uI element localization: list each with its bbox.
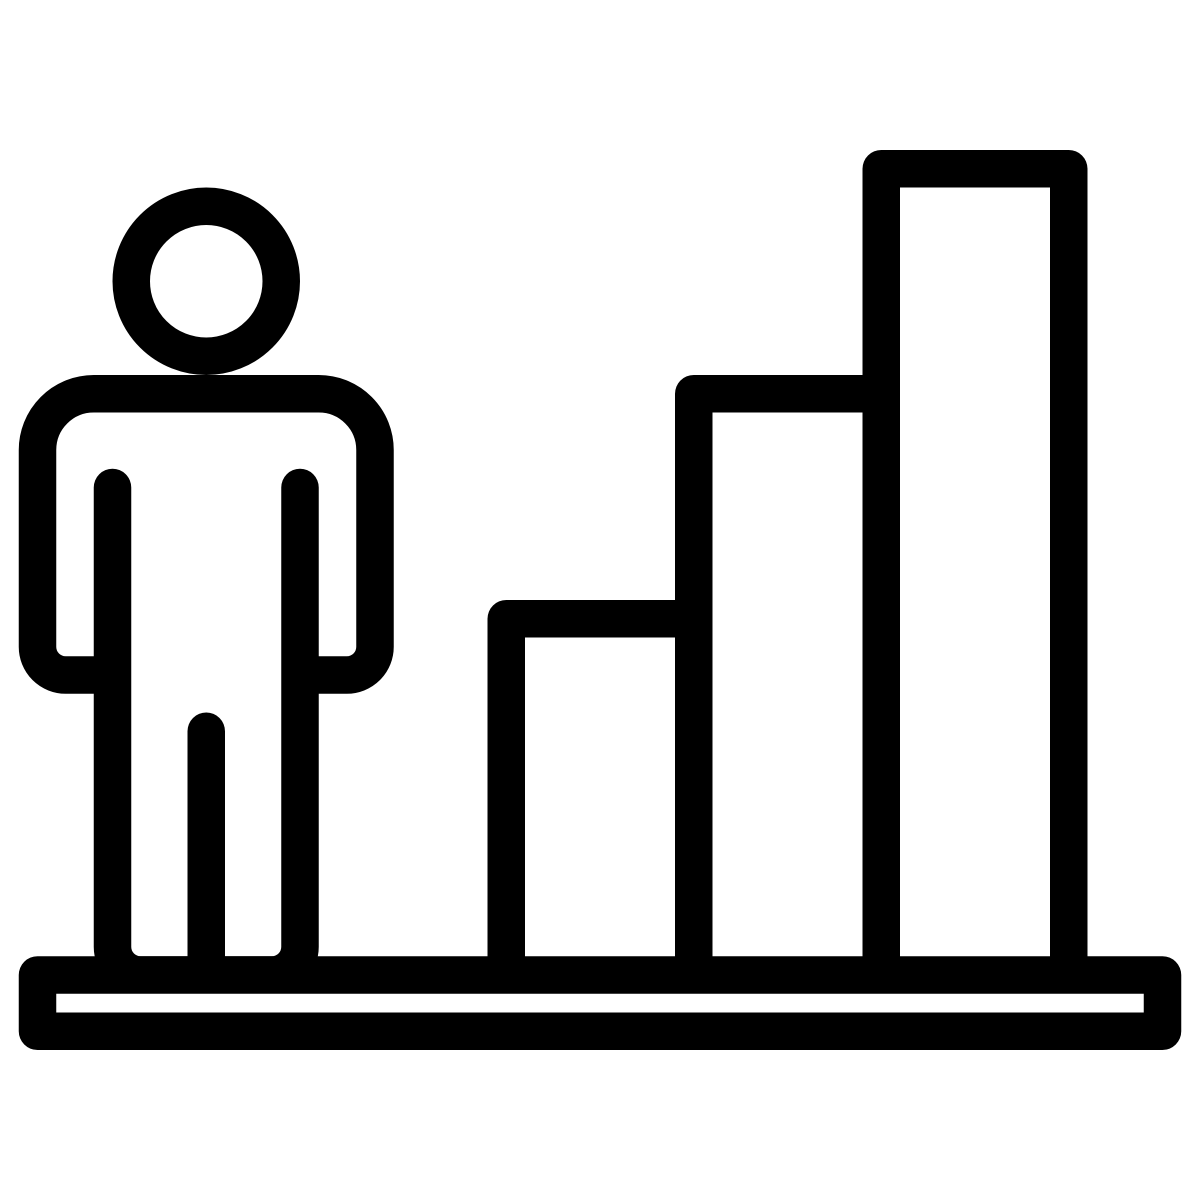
bar: tall [881,169,1069,975]
bar: short [506,619,675,975]
icon: person [38,206,375,975]
bar chart [506,169,1069,975]
base platform [38,975,1162,1031]
person head [131,206,281,356]
bar: medium [694,394,862,975]
person torso sides and legs [112,488,300,975]
person body outline [38,394,375,675]
person inner leg line [188,731,225,975]
